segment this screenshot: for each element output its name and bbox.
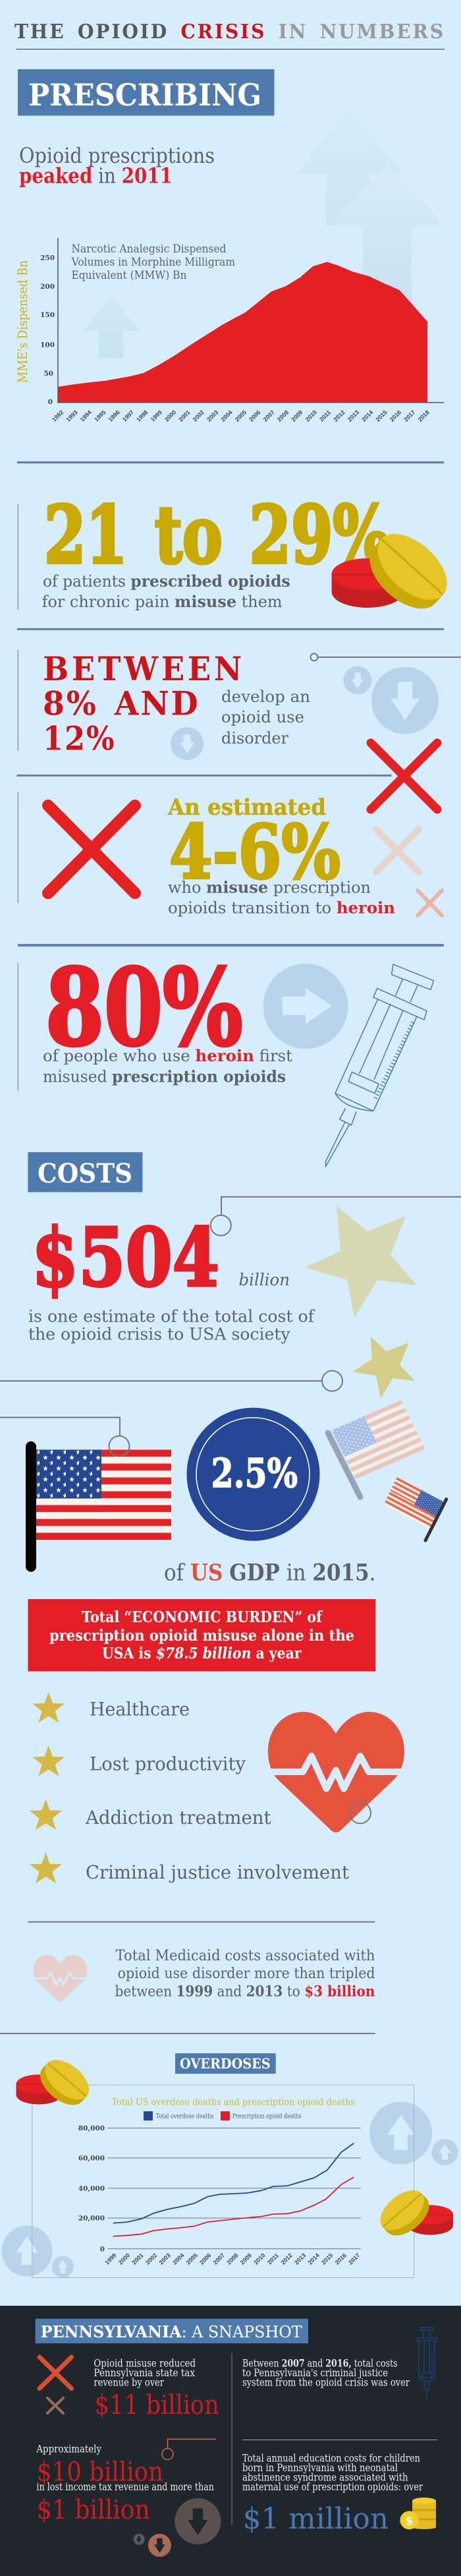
icon: coins — [400, 2498, 436, 2529]
text: prescriptions peaked: Opioid prescriptions — [19, 143, 215, 168]
x axis labels: 2010 — [252, 2252, 267, 2266]
chart caption: Volumes in Morphine Milligram — [71, 256, 235, 268]
panel: pennsylvania snapshot — [0, 2306, 461, 2576]
heading: overdoses: OVERDOSES — [180, 2055, 271, 2072]
x axis labels: 2007 — [212, 2252, 226, 2266]
icon: faded heart — [33, 1955, 88, 2002]
stat panel: 21 to 29%: of patients prescribed opioids — [43, 571, 290, 591]
x axis labels: 2012 — [332, 409, 346, 423]
text: medicaid — [115, 1948, 375, 2000]
icon: down arrow circles dark — [133, 2498, 221, 2557]
stat panel: 21 to 29% — [17, 489, 459, 621]
icon: heart with pulse — [267, 1712, 407, 1832]
x axis labels: 1998 — [135, 409, 149, 423]
text: prescriptions peaked — [19, 143, 215, 189]
y axis labels — [78, 2124, 105, 2253]
x axis labels: 2013 — [346, 409, 360, 423]
x axis labels: 2001 — [130, 2252, 145, 2266]
stat panel: between 8% and 12%: 12% — [43, 719, 116, 758]
x axis labels: 2017 — [347, 2252, 362, 2266]
text: criminal justice costs — [242, 2357, 410, 2389]
x axis labels: 2009 — [239, 2252, 253, 2266]
badge: 2.5% — [187, 1408, 320, 1541]
heading: pennsylvania: PENNSYLVANIA: A SNAPSHOT — [41, 2322, 302, 2341]
icon: background up arrows — [84, 109, 445, 358]
x axis labels: 2009 — [290, 409, 304, 423]
stat panel: 4-6%: An estimated — [167, 794, 326, 821]
connector: top right — [211, 1197, 461, 1235]
y axis labels: 0 — [100, 2245, 105, 2253]
x axis labels: 2014 — [360, 409, 374, 423]
connector: over flag — [0, 1417, 129, 1457]
stat: $10 billion and $1 billion: $10 billion — [37, 2457, 163, 2488]
y axis labels: 60,000 — [78, 2154, 105, 2162]
text: of US GDP in 2015: of US GDP in 2015. — [164, 1559, 375, 1586]
y axis labels: 20,000 — [78, 2215, 105, 2223]
x axis labels: 2016 — [334, 2252, 348, 2266]
stat panel: between 8% and 12%: disorder — [221, 729, 289, 747]
stat panel: 80%: of people who use heroin first — [43, 1046, 292, 1065]
line chart: overdose deaths — [32, 2085, 414, 2277]
x axis labels — [51, 409, 431, 423]
icon: X marks — [40, 2357, 71, 2413]
callout: economic burden: Total “ECONOMIC BURDEN” of — [82, 1608, 323, 1626]
stat: $11 billion: $11 billion — [95, 2390, 219, 2420]
x axis labels: 2016 — [389, 409, 402, 423]
x axis labels: 2013 — [293, 2252, 307, 2266]
x axis labels: 1992 — [51, 409, 65, 423]
x axis labels: 1996 — [107, 409, 121, 423]
text: medicaid: opioid use disorder more than tripled — [118, 1966, 375, 1982]
x axis labels: 2000 — [117, 2252, 131, 2266]
icon: US flag — [26, 1442, 171, 1572]
chart caption — [71, 243, 235, 281]
chart legend — [144, 2111, 302, 2121]
x axis labels: 2015 — [375, 409, 389, 423]
x axis labels: 2018 — [417, 409, 431, 423]
x axis labels: 2003 — [205, 409, 219, 423]
icon: pills — [332, 521, 459, 621]
chart legend: Prescription opioid deaths — [232, 2113, 302, 2121]
stat panel: 21 to 29%: for chronic pain misuse them — [42, 592, 283, 611]
x axis labels: 1993 — [65, 409, 79, 423]
icon: faded tilted flag — [328, 1400, 425, 1497]
icon: large pale star — [305, 1206, 417, 1318]
stat panel: 80% — [17, 945, 433, 1167]
text: criminal justice costs: to Pennsylvania's criminal justice — [242, 2367, 388, 2379]
x axis labels: 1999 — [103, 2252, 118, 2266]
callout: economic burden: prescription opioid misuse alone in the — [49, 1627, 354, 1645]
text: criminal justice costs: Between 2007 and 2016, total costs — [242, 2357, 398, 2370]
x axis labels: 2003 — [158, 2252, 172, 2266]
y axis labels: 250 — [40, 254, 55, 262]
icon: small star — [353, 1337, 415, 1399]
icon: star — [30, 1800, 62, 1830]
x axis labels: 2010 — [304, 409, 318, 423]
stat: $1 million: abstinence syndrome associated with — [242, 2472, 408, 2484]
icon: pills right — [373, 2183, 453, 2243]
x axis labels: 1994 — [79, 409, 93, 423]
x axis labels: 1997 — [121, 409, 135, 423]
icon: down arrow circles — [171, 666, 439, 760]
x axis labels: 2000 — [163, 409, 177, 423]
y axis labels: 0 — [48, 398, 53, 406]
chart title: Total US overdose deaths and prescription opioid deaths — [112, 2097, 355, 2108]
icon: coins: $ — [405, 2514, 414, 2528]
series lines — [113, 2143, 354, 2237]
list: burden categories — [30, 1692, 350, 1883]
text: medicaid: Total Medicaid costs associated with — [116, 1948, 375, 1964]
stat: $11 billion: Pennsylvania state tax — [94, 2367, 195, 2379]
stat panel: $504 billion: is one estimate of the total cost of — [28, 1306, 315, 1326]
icon: connector line — [311, 654, 461, 660]
heading: prescribing: PRESCRIBING — [28, 77, 261, 113]
text: lost productivity: Lost productivity — [90, 1753, 246, 1775]
icon: navy syringe — [417, 2327, 437, 2401]
x axis labels: 2011 — [266, 2252, 280, 2266]
x axis labels: 1999 — [149, 409, 163, 423]
stat: $1 million: Total annual education costs for children — [242, 2453, 420, 2465]
y axis labels: 50 — [43, 370, 53, 378]
icon: right arrow circle — [263, 964, 348, 1049]
x axis labels: 2015 — [320, 2252, 334, 2266]
y axis labels: 200 — [40, 283, 55, 291]
y axis labels: 100 — [40, 341, 55, 349]
x axis labels: 2006 — [198, 2252, 213, 2266]
y axis labels: 40,000 — [78, 2184, 105, 2192]
icon: syringe — [325, 964, 433, 1167]
icon: faded X marks — [376, 829, 442, 916]
text: prescriptions peaked: peaked in 2011 — [19, 163, 173, 189]
badge: 2.5%: 2.5% — [211, 1450, 298, 1497]
stat: $10 billion and $1 billion — [36, 2443, 214, 2525]
text: healthcare: Healthcare — [90, 1698, 190, 1720]
x axis labels: 2004 — [171, 2252, 185, 2266]
callout: economic burden — [28, 1599, 375, 1672]
y axis labels: 150 — [40, 311, 55, 319]
x axis labels: 2001 — [177, 409, 192, 423]
icon: star — [32, 1692, 65, 1723]
x axis labels: 2012 — [280, 2252, 294, 2266]
stat: $11 billion: Opioid misuse reduced — [94, 2358, 196, 2370]
x axis labels: 2005 — [234, 409, 248, 423]
callout: economic burden: USA is $78.5 billion a year — [102, 1645, 302, 1662]
area chart: MME dispensed — [14, 238, 444, 423]
stat: $10 billion and $1 billion: $1 billion — [37, 2495, 150, 2525]
text: criminal justice: Criminal justice involvement — [86, 1861, 350, 1883]
stat: $1 million: $1 million — [243, 2502, 389, 2536]
heading: costs: COSTS — [38, 1158, 132, 1189]
connector: mid left — [0, 1371, 342, 1391]
x axis labels: 2014 — [307, 2252, 321, 2266]
x axis labels: 2011 — [318, 409, 332, 423]
stat panel: 4-6%: who misuse prescription — [168, 878, 371, 896]
icon: red X — [48, 805, 135, 893]
icon: star — [32, 1745, 65, 1776]
stat panel: 80%: 80% — [45, 945, 242, 1069]
text: medicaid: between 1999 and 2013 to $3 billion — [115, 1983, 375, 2000]
text: addiction treatment: Addiction treatment — [85, 1807, 271, 1829]
icon: big red X — [371, 743, 437, 809]
stat panel: 4-6% — [17, 792, 442, 918]
x axis labels: 2008 — [225, 2252, 240, 2266]
stat panel: between 8% and 12%: opioid use — [221, 708, 304, 726]
stat panel: $504 billion: $504 — [32, 1210, 219, 1305]
icon: star — [30, 1853, 62, 1883]
chart area — [58, 262, 427, 403]
y axis title: MME's Dispensed Bn — [14, 260, 30, 383]
stat panel: between 8% and 12%: develop an — [221, 688, 310, 706]
x axis labels: 2007 — [262, 409, 276, 423]
x axis labels: 2002 — [192, 409, 205, 423]
x axis labels: 2006 — [248, 409, 262, 423]
chart legend: Total overdose deaths — [156, 2113, 214, 2121]
heading: costs — [28, 1152, 142, 1192]
stat: $1 million — [242, 2453, 423, 2536]
y axis labels — [40, 254, 55, 406]
x axis labels: 2008 — [276, 409, 290, 423]
connector: orange — [162, 2439, 216, 2460]
stat panel: 4-6%: 4-6% — [169, 809, 340, 896]
x axis labels: 2004 — [219, 409, 234, 423]
stat panel: $504 billion: billion — [238, 1270, 290, 1289]
icon: up arrow circles — [1, 2101, 458, 2278]
x axis labels — [103, 2252, 362, 2266]
x axis labels: 1995 — [93, 409, 107, 423]
title: THE OPIOID CRISIS IN NUMBERS — [14, 20, 445, 44]
stat: $11 billion — [94, 2358, 219, 2420]
icon: pills top left — [16, 2053, 97, 2113]
stat panel: between 8% and 12%: BETWEEN — [43, 649, 245, 688]
text: criminal justice costs: system from the opioid crisis was over — [242, 2377, 410, 2389]
stat: $11 billion: revenue by over — [94, 2377, 164, 2389]
stat panel: 80%: misused prescription opioids — [43, 1067, 286, 1086]
stat panel: $504 billion — [28, 1210, 315, 1343]
stat panel: between 8% and 12% — [17, 649, 461, 760]
stat panel: $504 billion: the opioid crisis to USA society — [28, 1325, 290, 1343]
chart caption: Narcotic Analegsic Dispensed — [71, 243, 227, 255]
chart caption: Equivalent (MMW) Bn — [71, 269, 187, 281]
panel: medicaid costs — [33, 1948, 375, 2002]
x axis labels: 2017 — [402, 409, 417, 423]
stat: $10 billion and $1 billion: Approximately — [36, 2443, 101, 2455]
icon: small tilted flag — [384, 1477, 447, 1540]
x axis labels: 2005 — [185, 2252, 199, 2266]
stat: $1 million: born in Pennsylvania with neonatal — [242, 2462, 398, 2474]
stat panel: between 8% and 12%: 8% AND — [43, 684, 200, 723]
stat: $10 billion and $1 billion: in lost income tax revenue and more than — [36, 2481, 214, 2493]
stat: $1 million: maternal use of prescription opioids: over — [242, 2481, 423, 2493]
x axis labels: 2002 — [144, 2252, 158, 2266]
y axis labels: 80,000 — [78, 2124, 105, 2132]
stat panel: 4-6%: opioids transition to heroin — [168, 898, 395, 918]
